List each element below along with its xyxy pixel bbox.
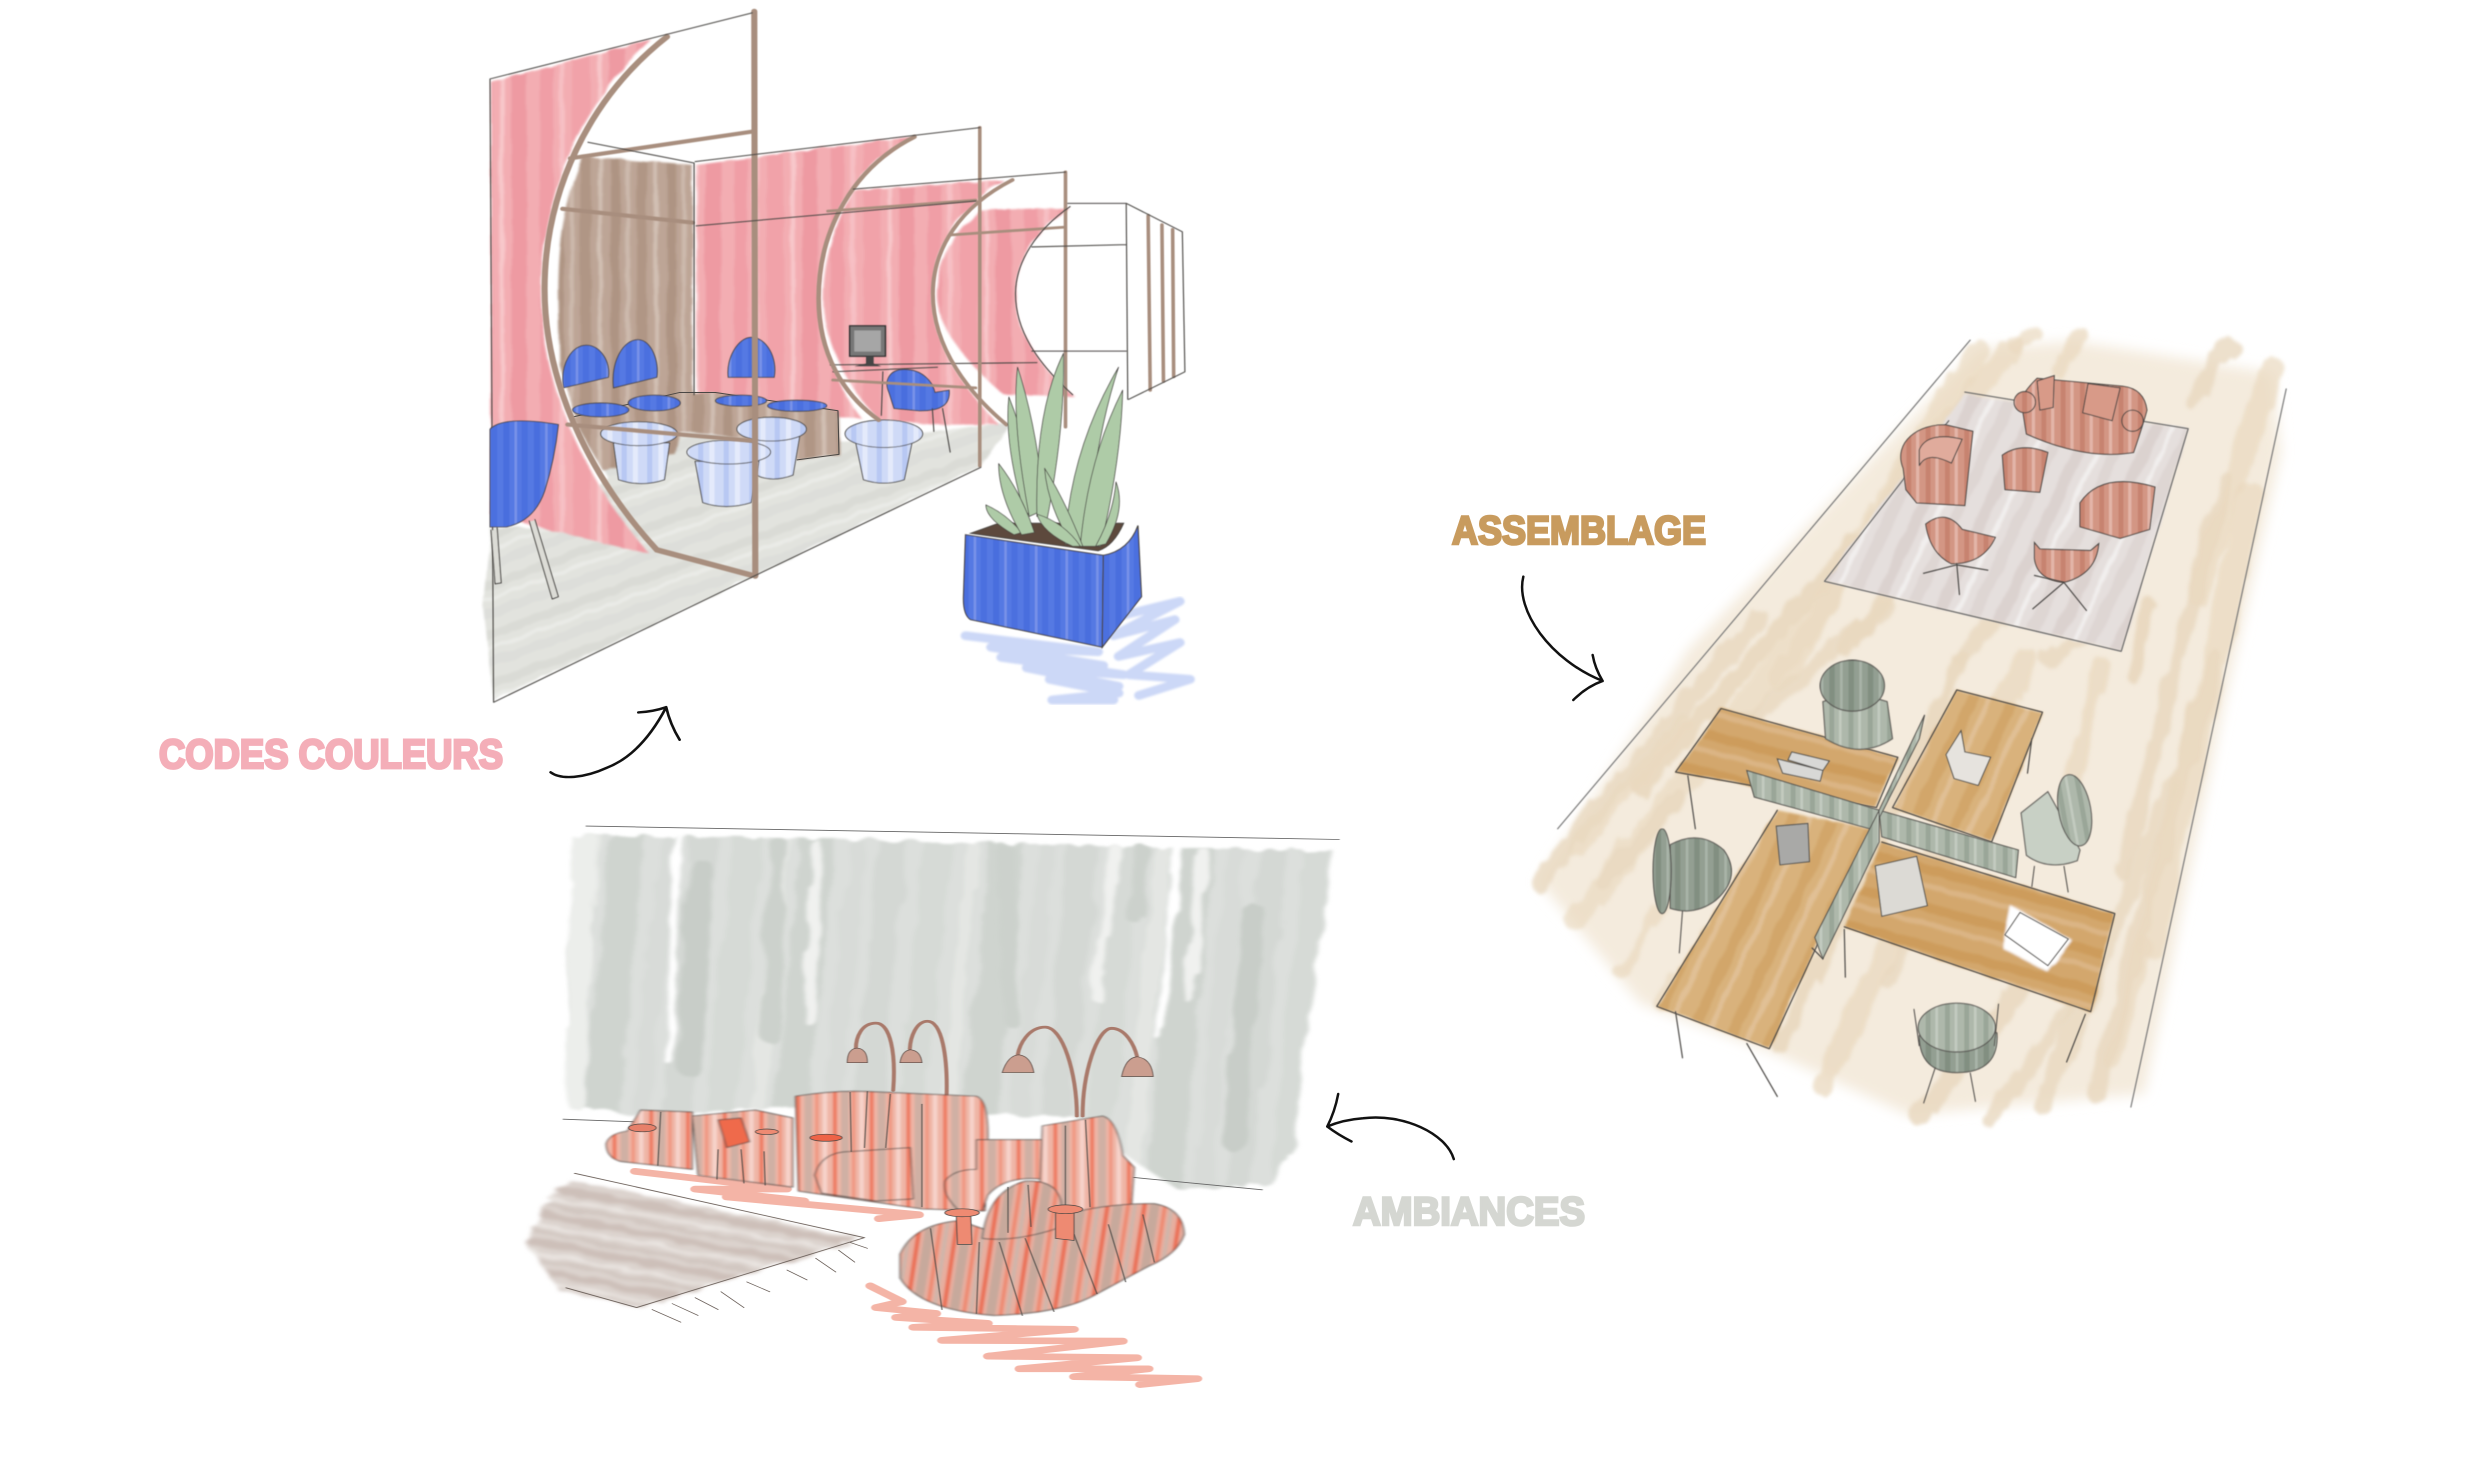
planter with soil [963, 523, 1142, 647]
floor scribble under sofas [635, 1171, 1197, 1385]
modular sofas [606, 1091, 1184, 1315]
rug with fringe [526, 1173, 867, 1322]
light blue stools [601, 417, 923, 507]
sage chairs [1653, 660, 2097, 1103]
sketch: office assemblage [1539, 336, 2286, 1120]
side tables [629, 1124, 1083, 1244]
desk tops [1657, 690, 2115, 1049]
pink wall panels [491, 39, 1075, 554]
blue seats and cushions [563, 337, 827, 417]
wall and floor lines [563, 826, 1339, 1190]
terracotta lounge set [1901, 376, 2155, 582]
desk outlines and legs [1657, 690, 2115, 1096]
sketch: ambiance lounge [526, 826, 1339, 1385]
label: assemblage: ASSEMBLAGE [1452, 509, 1706, 553]
arrow: codes couleurs to stand [551, 707, 680, 777]
wall lamps [847, 1021, 1153, 1116]
blue floor scribble [966, 601, 1190, 700]
floor wash [483, 422, 1011, 700]
beige floor wash [1539, 336, 2281, 1120]
arrow: assemblage to office [1522, 577, 1603, 700]
label: ambiances: AMBIANCES [1353, 1190, 1585, 1234]
sofa seam lines [658, 1092, 1154, 1315]
sage privacy panels [1747, 715, 2018, 959]
curved rings, posts and bars [545, 11, 1174, 576]
arrow: ambiances to lounge [1327, 1094, 1454, 1159]
floor edge lines [1558, 340, 2286, 1107]
sketch: colour codes stand [483, 11, 1190, 702]
grey curtain wash [568, 834, 1335, 1189]
plant leaves [986, 353, 1123, 546]
pencil outlines [490, 13, 1185, 702]
swivel chair bases [1924, 564, 2086, 610]
corner sofa [574, 392, 839, 470]
rug [1824, 392, 2188, 651]
brown back wall [558, 156, 693, 422]
paper sheet and laptops [1776, 731, 2068, 966]
desk, monitor and office chair [830, 326, 1037, 452]
label: codes couleurs: CODES COULEURS [159, 731, 503, 777]
front blue chair [490, 421, 558, 599]
